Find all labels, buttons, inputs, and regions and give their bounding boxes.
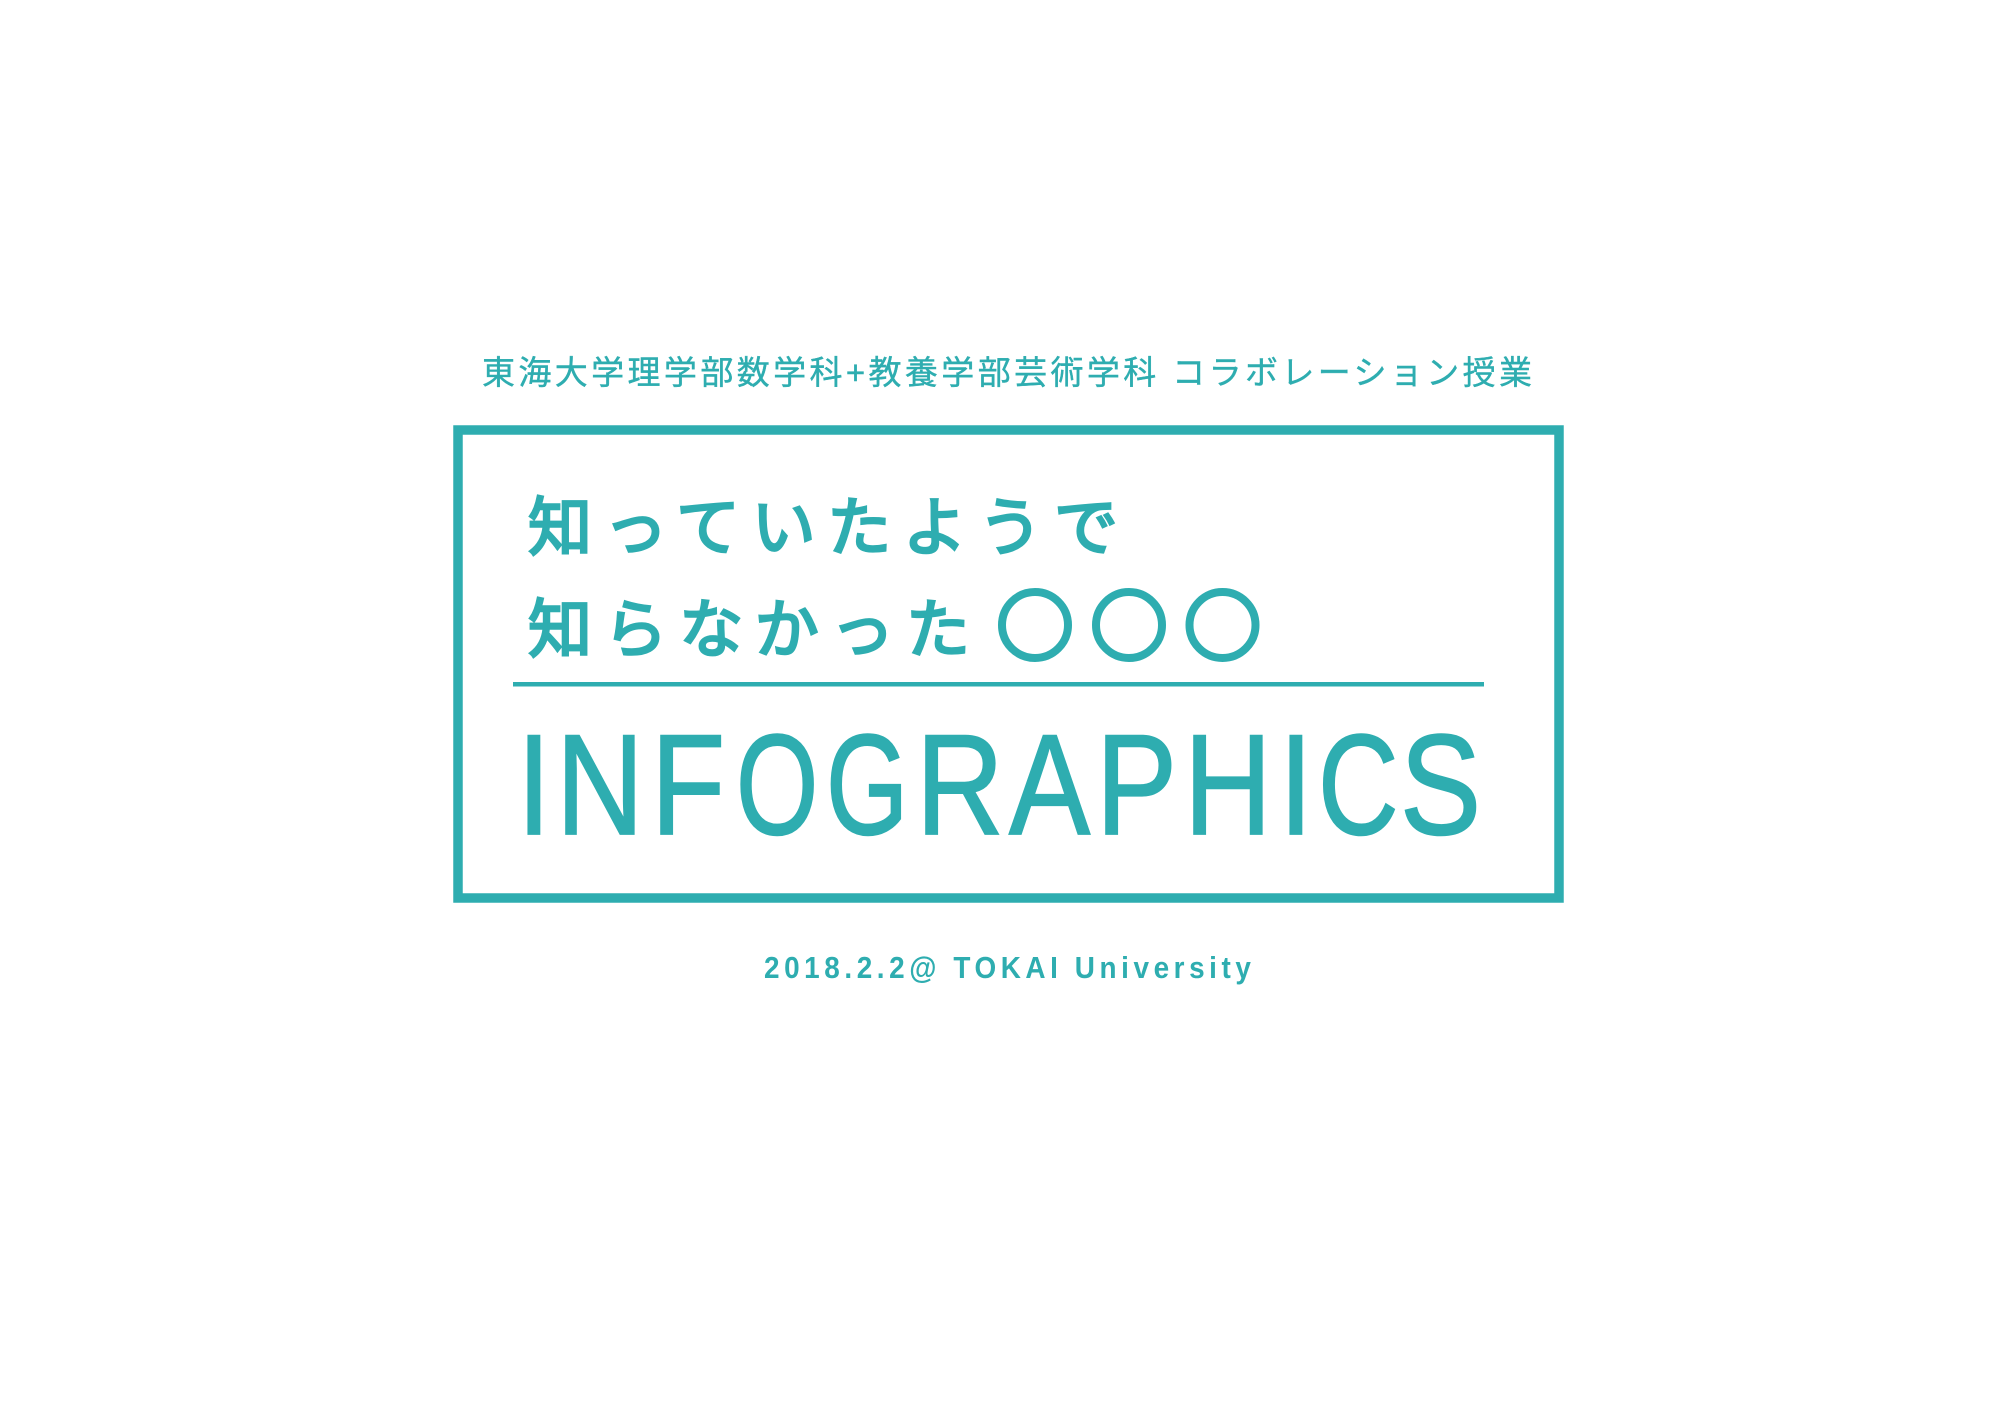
title: INFOGRAPHICS: I: [1279, 706, 1313, 865]
divider rule: [513, 682, 1484, 686]
title: first Japanese line: 知っていたようで: [528, 492, 1118, 564]
title: INFOGRAPHICS: C: [1318, 706, 1399, 865]
title: INFOGRAPHICS: I: [517, 706, 551, 865]
title: INFOGRAPHICS: P: [1096, 706, 1177, 865]
title: INFOGRAPHICS: S: [1400, 706, 1481, 865]
title: INFOGRAPHICS: H: [1184, 706, 1272, 865]
title: INFOGRAPHICS: N: [556, 706, 644, 865]
panel: title frame: [458, 430, 1559, 898]
title: INFOGRAPHICS: F: [651, 706, 725, 865]
title: INFOGRAPHICS: [517, 704, 1481, 865]
title: INFOGRAPHICS: A: [1009, 706, 1091, 865]
title: second Japanese line: [528, 592, 1256, 666]
title: second Japanese line: 知らなかった: [528, 594, 970, 666]
heading: collaboration class subtitle: 東海大学理学部数学科+教養学部芸術学科 コラボレーション授業: [482, 354, 1532, 391]
title: INFOGRAPHICS: O: [736, 704, 818, 865]
title: INFOGRAPHICS: G: [826, 704, 908, 865]
icon: three hollow circles: [1002, 592, 1256, 658]
title: INFOGRAPHICS: R: [916, 706, 1004, 865]
date and venue line: 2018.2.2@ TOKAI University: [764, 951, 1251, 985]
